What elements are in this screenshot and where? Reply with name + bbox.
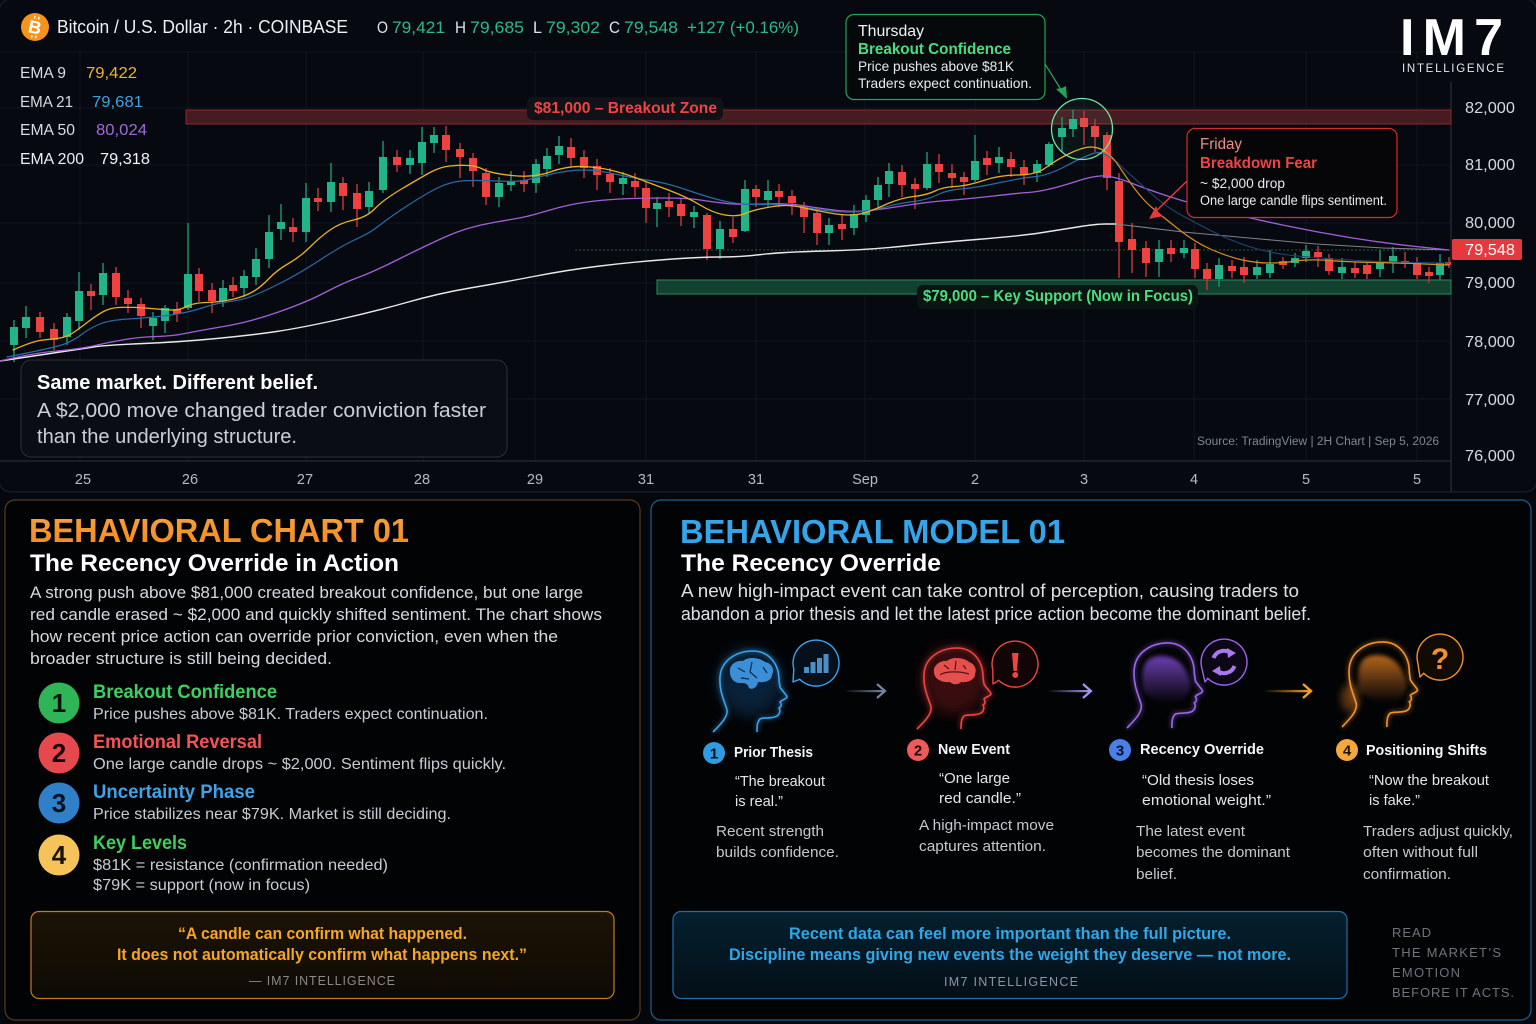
heading: behavioral chart: BEHAVIORAL CHART 01 bbox=[29, 512, 409, 549]
OHLC values: 79,302 bbox=[546, 19, 600, 37]
icon: bitcoin: B bbox=[26, 16, 43, 39]
paragraph: how recent price action can override prior conviction, even when the bbox=[30, 627, 558, 646]
support zone label: $79,000 – Key Support (Now in Focus) bbox=[923, 288, 1193, 305]
item 1: 1 bbox=[52, 688, 66, 718]
price axis labels: 78,000 bbox=[1465, 334, 1515, 351]
item 2: One large candle drops ~ $2,000. Sentiment flips quickly. bbox=[93, 756, 506, 773]
quote box: “A candle can confirm what happened. bbox=[178, 924, 467, 943]
price axis labels: 76,000 bbox=[1465, 448, 1515, 465]
arrow: Thursday callout bbox=[1045, 64, 1067, 99]
callout: Friday: Friday bbox=[1200, 136, 1242, 153]
item 1 bbox=[38, 682, 488, 724]
icon: red head with brain bbox=[917, 641, 1038, 729]
EMA legend: 79,318 bbox=[100, 151, 150, 168]
step 1: prior thesis: is real.” bbox=[735, 793, 783, 810]
breakout zone band bbox=[186, 110, 1451, 124]
callout: same market, different belief: Same market. Different belief. bbox=[37, 372, 318, 394]
OHLC values: C bbox=[609, 19, 620, 37]
label bbox=[1336, 739, 1358, 761]
OHLC values: 79,685 bbox=[470, 19, 524, 37]
EMA 200 line bbox=[0, 224, 1116, 361]
panel: behavioral model bbox=[651, 500, 1531, 1020]
red bodies bbox=[40, 118, 1449, 340]
discipline box bbox=[673, 912, 1347, 998]
price axis labels: 81,000 bbox=[1465, 157, 1515, 174]
discipline box: IM7 INTELLIGENCE bbox=[944, 975, 1078, 989]
step 4: positioning shifts: “Now the breakout bbox=[1369, 772, 1490, 789]
EMA legend: EMA 21 bbox=[20, 94, 73, 111]
step 3: recency override: The latest event bbox=[1136, 823, 1246, 840]
date axis labels: Sep bbox=[852, 472, 878, 488]
date axis labels: 31 bbox=[638, 472, 654, 488]
chart grid bbox=[0, 52, 1451, 461]
current price tag: 79,548 bbox=[1465, 242, 1515, 259]
callout: Thursday: Traders expect continuation. bbox=[858, 75, 1032, 91]
date axis labels: 5 bbox=[1413, 472, 1421, 488]
icon: orange head bbox=[1341, 634, 1463, 727]
arrow: Friday callout bbox=[1149, 181, 1187, 219]
callout: same market, different belief bbox=[21, 360, 507, 457]
support zone band bbox=[657, 280, 1451, 294]
step 3: recency override: becomes the dominant bbox=[1136, 844, 1291, 861]
step 4: positioning shifts: often without full bbox=[1363, 844, 1478, 861]
OHLC values: 79,421 bbox=[392, 19, 445, 37]
step 2: new event: captures attention. bbox=[919, 838, 1046, 855]
item 4: $81K = resistance (confirmation needed) bbox=[93, 857, 388, 874]
paragraph bbox=[681, 581, 1311, 624]
EMA 200 fading line bbox=[1116, 224, 1449, 250]
EMA legend: 79,681 bbox=[92, 94, 143, 111]
axis lines bbox=[0, 82, 1451, 492]
date axis labels bbox=[75, 472, 1421, 488]
item 4: $79K = support (now in focus) bbox=[93, 877, 310, 894]
EMA 21 fading line bbox=[1118, 164, 1449, 263]
step 4: positioning shifts: 4 bbox=[1343, 742, 1352, 760]
callout: Friday bbox=[1187, 128, 1397, 218]
EMA 50 line bbox=[0, 176, 1449, 361]
subheading: The Recency Override bbox=[681, 550, 941, 577]
step 2: new event: New Event bbox=[938, 741, 1010, 758]
callout: Friday: Breakdown Fear bbox=[1200, 155, 1317, 172]
step 4: positioning shifts: Traders adjust quickly, bbox=[1363, 823, 1513, 840]
callout: Friday: ~ $2,000 drop bbox=[1200, 175, 1285, 191]
quote box bbox=[31, 912, 614, 998]
callout: same market, different belief: A $2,000 move changed trader conviction faster bbox=[37, 400, 486, 422]
price axis labels: 77,000 bbox=[1465, 392, 1515, 409]
panel: behavioral chart bbox=[5, 500, 640, 1020]
item 3 bbox=[38, 782, 451, 824]
EMA legend: EMA 50 bbox=[20, 122, 75, 139]
step 3: recency override: emotional weight.” bbox=[1142, 792, 1271, 809]
EMA 21 line bbox=[7, 153, 1118, 357]
date axis labels: 4 bbox=[1190, 472, 1198, 488]
paragraph: A strong push above $81,000 created breakout confidence, but one large bbox=[30, 583, 583, 602]
step 1: prior thesis: Prior Thesis bbox=[734, 744, 813, 761]
EMA legend bbox=[20, 65, 150, 168]
callout: same market, different belief: than the underlying structure. bbox=[37, 426, 297, 448]
step 3: recency override: 3 bbox=[1116, 742, 1124, 760]
tagline: BEFORE IT ACTS. bbox=[1392, 985, 1514, 1000]
OHLC values: 79,548 bbox=[624, 19, 678, 37]
item 3: Price stabilizes near $79K. Market is still deciding. bbox=[93, 806, 451, 823]
green bodies bbox=[14, 119, 1440, 345]
asset header: Bitcoin / U.S. Dollar · 2h · COINBASE bbox=[57, 17, 348, 37]
date axis labels: 29 bbox=[527, 472, 543, 488]
quote box: — IM7 INTELLIGENCE bbox=[249, 974, 395, 988]
paragraph: red candle erased ~ $2,000 and quickly shifted sentiment. The chart shows bbox=[30, 605, 602, 624]
step 3: recency override: “Old thesis loses bbox=[1142, 772, 1254, 789]
date axis labels: 31 bbox=[748, 472, 764, 488]
item 1: Price pushes above $81K. Traders expect continuation. bbox=[93, 706, 488, 723]
tagline: READ bbox=[1392, 925, 1431, 940]
step 4: positioning shifts: confirmation. bbox=[1363, 866, 1451, 883]
label bbox=[703, 742, 725, 764]
item 4: 4 bbox=[52, 840, 67, 870]
logo: INTELLIGENCE bbox=[1402, 63, 1504, 75]
step 1: prior thesis: builds confidence. bbox=[716, 844, 839, 861]
EMA legend: EMA 9 bbox=[20, 65, 66, 82]
quote box: It does not automatically confirm what happens next.” bbox=[117, 945, 527, 964]
step 2: new event: red candle.” bbox=[939, 790, 1021, 807]
date axis labels: 25 bbox=[75, 472, 91, 488]
date axis labels: 3 bbox=[1080, 472, 1088, 488]
step 3: recency override: Recency Override bbox=[1140, 741, 1264, 758]
date axis labels: 27 bbox=[297, 472, 313, 488]
item 3: 3 bbox=[52, 788, 66, 818]
callout: Thursday: Thursday bbox=[858, 23, 924, 40]
green wicks bbox=[14, 110, 1440, 362]
step 1: prior thesis: Recent strength bbox=[716, 823, 824, 840]
current price tag bbox=[1452, 239, 1522, 260]
breakout zone label: $81,000 – Breakout Zone bbox=[534, 100, 717, 117]
paragraph: abandon a prior thesis and let the latest price action become the dominant belief. bbox=[681, 604, 1311, 624]
OHLC values: O bbox=[377, 19, 388, 37]
icon: alert bubble bbox=[992, 641, 1038, 687]
step 4: positioning shifts bbox=[1336, 634, 1513, 883]
date axis labels: 2 bbox=[971, 472, 979, 488]
step 1: prior thesis bbox=[703, 640, 839, 861]
step 2: new event bbox=[907, 641, 1054, 855]
arrow: step 3 to 4 bbox=[1263, 684, 1311, 698]
callout: Thursday bbox=[846, 14, 1045, 100]
EMA legend: 80,024 bbox=[96, 122, 147, 139]
item 2 bbox=[38, 732, 506, 774]
arrow: step 1 to 2 bbox=[843, 684, 885, 698]
price axis labels bbox=[1465, 100, 1515, 465]
EMA legend: 79,422 bbox=[86, 65, 137, 82]
date axis labels: 5 bbox=[1302, 472, 1310, 488]
label bbox=[1109, 739, 1131, 761]
step 3: recency override: belief. bbox=[1136, 866, 1177, 883]
icon: purple head bbox=[1127, 639, 1247, 728]
item 4 bbox=[38, 833, 388, 894]
price axis labels: 80,000 bbox=[1465, 215, 1515, 232]
asset header bbox=[21, 13, 348, 41]
panel: price chart bbox=[0, 0, 1536, 492]
paragraph bbox=[30, 583, 602, 668]
OHLC values bbox=[377, 19, 799, 37]
price axis labels: 79,000 bbox=[1465, 275, 1515, 292]
candlesticks bbox=[14, 110, 1449, 362]
OHLC values: H bbox=[455, 19, 466, 37]
icon: chart bubble bbox=[793, 640, 839, 686]
paragraph: broader structure is still being decided. bbox=[30, 649, 332, 668]
step 1: prior thesis: “The breakout bbox=[735, 773, 826, 790]
discipline box: Discipline means giving new events the weight they deserve — not more. bbox=[729, 945, 1291, 964]
icon: blue head with brain bbox=[713, 640, 839, 732]
callout: Friday: One large candle flips sentiment. bbox=[1200, 193, 1387, 208]
support zone label bbox=[917, 285, 1198, 309]
EMA 9 line bbox=[13, 147, 1106, 350]
icon: cycle bubble bbox=[1201, 639, 1247, 685]
item 2: Emotional Reversal bbox=[93, 732, 262, 753]
EMA 9 orange line bbox=[1106, 152, 1449, 265]
callout: breakout highlight circle bbox=[1052, 98, 1112, 160]
icon: question bubble: ? bbox=[1431, 643, 1449, 676]
subheading: The Recency Override in Action bbox=[30, 550, 399, 577]
step 4: positioning shifts: Positioning Shifts bbox=[1366, 742, 1487, 759]
item 4: Key Levels bbox=[93, 833, 187, 854]
price axis labels: 82,000 bbox=[1465, 100, 1515, 117]
date axis labels: 28 bbox=[414, 472, 430, 488]
logo: IM7 bbox=[1400, 9, 1503, 67]
callout: Thursday: Price pushes above $81K bbox=[858, 58, 1015, 74]
item 1: Breakout Confidence bbox=[93, 682, 277, 703]
item 2: 2 bbox=[52, 738, 66, 768]
icon: bitcoin bbox=[21, 13, 49, 41]
tagline bbox=[1392, 925, 1514, 1000]
label bbox=[907, 739, 929, 761]
tagline: THE MARKET’S bbox=[1392, 945, 1501, 960]
arrow: step 2 to 3 bbox=[1047, 684, 1091, 698]
faint green level bbox=[558, 250, 1451, 262]
step 3: recency override bbox=[1109, 639, 1291, 883]
red wicks bbox=[40, 111, 1449, 350]
source note: Source: TradingView | 2H Chart | Sep 5, 2026 bbox=[1197, 436, 1439, 448]
EMA legend: EMA 200 bbox=[20, 151, 84, 168]
step 2: new event: A high-impact move bbox=[919, 817, 1054, 834]
step 2: new event: 2 bbox=[914, 742, 922, 760]
EMA lines bbox=[0, 147, 1449, 361]
step 2: new event: “One large bbox=[939, 770, 1010, 787]
callout: Thursday: Breakout Confidence bbox=[858, 41, 1011, 58]
date axis labels: 26 bbox=[182, 472, 198, 488]
paragraph: A new high-impact event can take control of perception, causing traders to bbox=[681, 581, 1299, 601]
discipline box: Recent data can feel more important than the full picture. bbox=[789, 924, 1231, 943]
heading: behavioral model: BEHAVIORAL MODEL 01 bbox=[680, 513, 1065, 550]
tagline: EMOTION bbox=[1392, 965, 1460, 980]
OHLC values: +127 (+0.16%) bbox=[687, 19, 799, 37]
step 1: prior thesis: 1 bbox=[710, 746, 718, 762]
item 3: Uncertainty Phase bbox=[93, 782, 255, 803]
OHLC values: L bbox=[533, 19, 542, 37]
step 4: positioning shifts: is fake.” bbox=[1369, 792, 1420, 809]
